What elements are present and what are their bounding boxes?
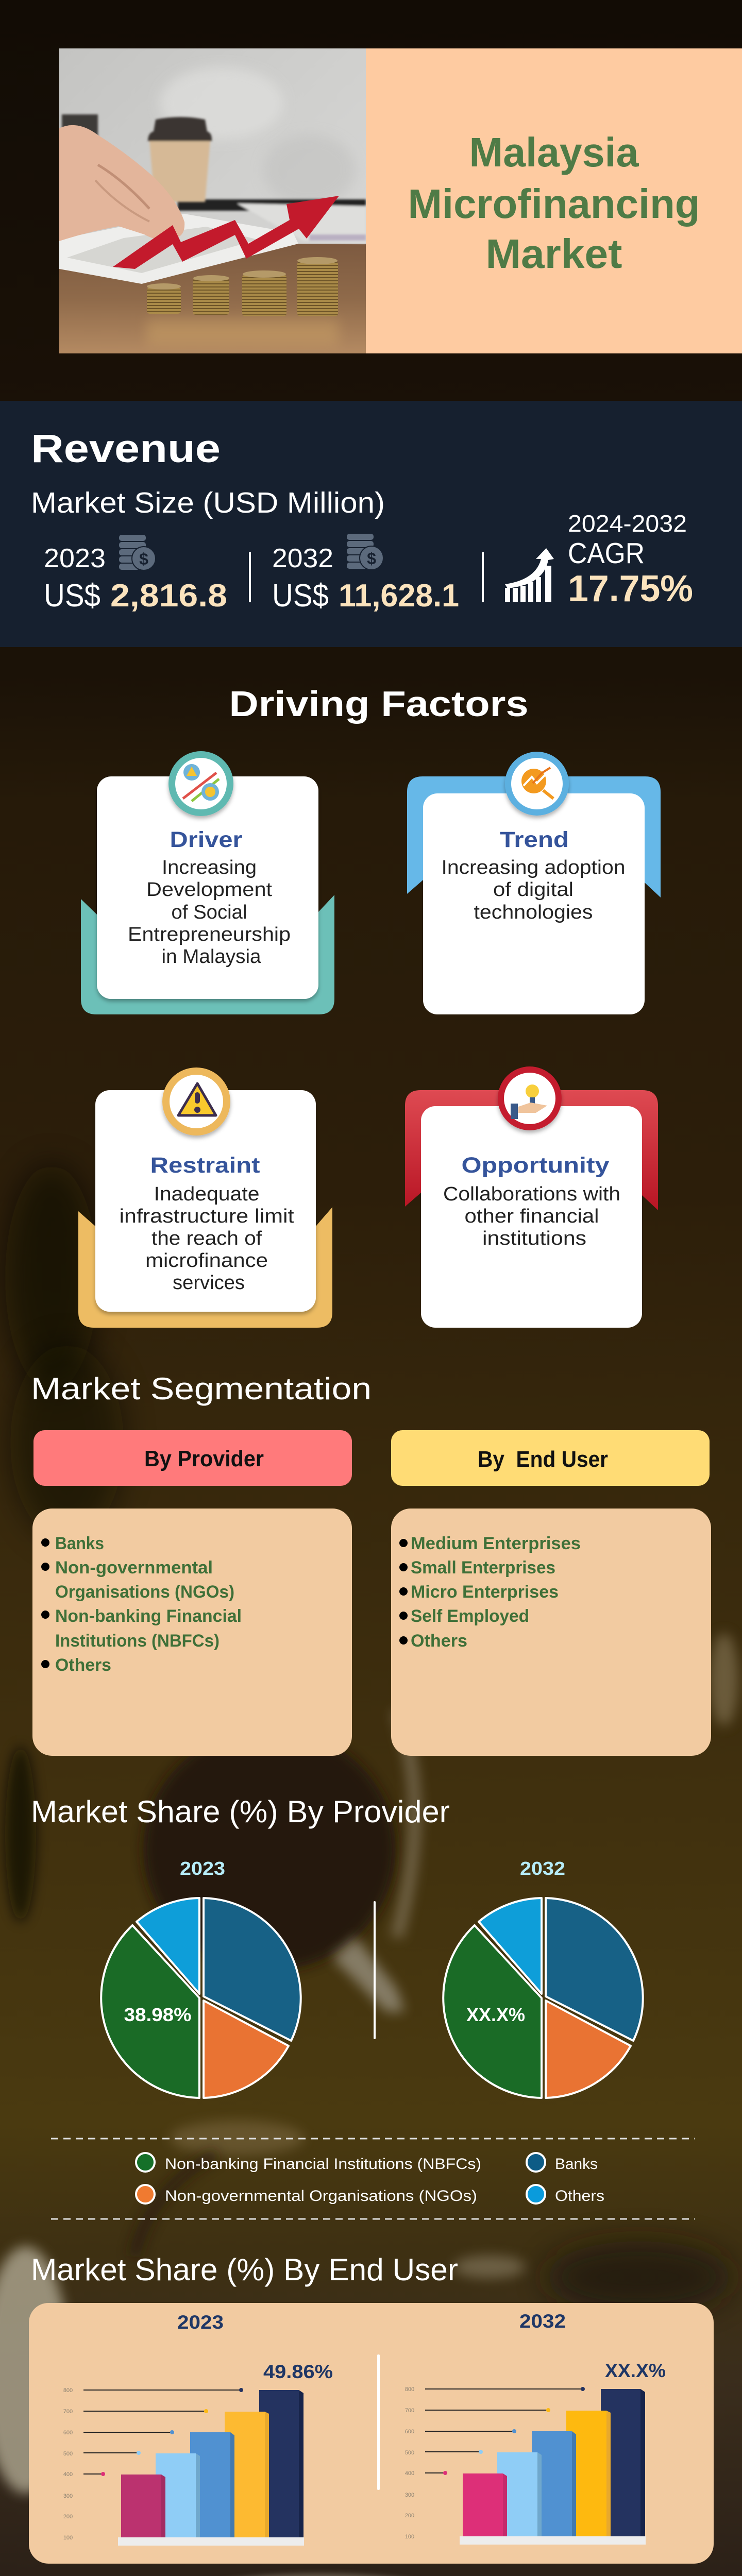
bar chart 2023: 400 — [63, 2471, 73, 2478]
bar chart 2023: 700 — [63, 2409, 73, 2415]
bar chart 2032 — [405, 2386, 646, 2545]
restraint text: services — [173, 1272, 245, 1294]
panel: end user list: Self Employed — [411, 1606, 529, 1626]
bar chart 2032: 100 — [405, 2534, 414, 2540]
red arrow — [113, 196, 339, 269]
stat: 2032: 2032 — [272, 544, 333, 573]
card: trend — [407, 752, 661, 1014]
icon: restraint — [162, 1067, 230, 1136]
pie chart 2023 — [101, 1898, 301, 2098]
title: Market — [485, 231, 622, 277]
title — [408, 129, 700, 277]
legend: provider: Non-banking Financial Institutions (NBFCs) — [165, 2156, 481, 2173]
heading: market segmentation: Market Segmentation — [31, 1371, 372, 1406]
market size label: Market Size (USD Million) — [31, 486, 385, 519]
pill: by provider — [33, 1430, 352, 1486]
opportunity text: other financial — [465, 1206, 599, 1227]
bar chart 2032: 400 — [405, 2470, 414, 2477]
label: pie 2032: 2032 — [520, 1858, 565, 1879]
panel: end user list: Small Enterprises — [411, 1558, 555, 1578]
label: pie 2023: 2023 — [180, 1858, 225, 1879]
bar chart 2032: 700 — [405, 2408, 414, 2414]
trend heading: Trend — [500, 827, 569, 852]
opportunity text: institutions — [482, 1228, 586, 1249]
restraint text: Inadequate — [154, 1183, 260, 1205]
restraint text: microfinance — [145, 1250, 268, 1272]
CAGR: 2024-2032 — [568, 510, 687, 537]
hero photo — [59, 48, 366, 353]
driver text: Entrepreneurship — [128, 924, 291, 945]
title panel — [366, 48, 742, 353]
icon: coins 2032: $ — [367, 549, 376, 568]
restraint text: the reach of — [151, 1228, 262, 1249]
driver text: of Social — [171, 902, 247, 923]
divider — [482, 552, 484, 602]
panel: provider list: Non-governmental — [55, 1558, 213, 1578]
panel: provider list: Others — [55, 1655, 111, 1675]
card: restraint — [78, 1067, 332, 1328]
panel: provider list: Institutions (NBFCs) — [55, 1631, 220, 1651]
restraint text — [120, 1183, 294, 1294]
stat: 2023: US$ — [44, 578, 100, 614]
bar chart 2023: 300 — [63, 2493, 73, 2499]
CAGR — [568, 510, 693, 609]
bar chart 2032: 500 — [405, 2450, 414, 2456]
pill: by provider: By Provider — [144, 1446, 264, 1471]
restraint heading: Restraint — [150, 1153, 260, 1178]
legend: provider: Non-governmental Organisations (NGOs) — [165, 2188, 477, 2205]
icon: coins 2023 — [119, 535, 156, 570]
heading: market share by end user: Market Share (%) By End User — [31, 2252, 458, 2287]
opportunity text — [443, 1183, 620, 1249]
coin stacks — [147, 257, 339, 345]
driver heading: Driver — [170, 827, 243, 852]
legend: provider: Others — [555, 2188, 604, 2205]
pie chart 2032 — [443, 1898, 643, 2098]
panel: provider list: Non-banking Financial — [55, 1606, 242, 1626]
pie chart 2032: XX.X% — [466, 2004, 525, 2025]
bar chart 2023: 800 — [63, 2387, 73, 2394]
pie chart 2023: 38.98% — [124, 2004, 192, 2025]
driver text: Increasing — [162, 857, 257, 878]
opportunity heading: Opportunity — [462, 1153, 610, 1178]
label: 2032: 2032 — [519, 2311, 566, 2332]
coffee cup — [148, 117, 212, 202]
stat: 2032 — [272, 544, 459, 614]
revenue band — [0, 401, 742, 647]
icon: growth chart — [505, 548, 554, 602]
driver text: Development — [146, 879, 272, 901]
bar chart 2023: 200 — [63, 2514, 73, 2520]
title: Malaysia — [469, 129, 639, 175]
card: driver — [81, 751, 334, 1014]
label: 2023: 2023 — [177, 2312, 224, 2333]
divider — [374, 1901, 376, 2039]
icon: coins 2023: $ — [139, 550, 148, 568]
panel: end user list: Others — [411, 1631, 467, 1651]
CAGR: CAGR — [568, 537, 645, 570]
trend text: technologies — [474, 902, 593, 923]
restraint text: infrastructure limit — [120, 1206, 294, 1227]
driver text: in Malaysia — [162, 946, 261, 968]
legend: provider: Banks — [555, 2156, 598, 2173]
legend: provider — [136, 2153, 604, 2205]
pill: by end user: By End User — [478, 1447, 608, 1472]
icon: trend — [505, 752, 569, 816]
panel: end user list: Medium Enterprises — [411, 1534, 581, 1553]
icon: coins 2032 — [347, 534, 383, 570]
bar chart 2032: 200 — [405, 2513, 414, 2519]
panel: provider list: Organisations (NGOs) — [55, 1582, 234, 1602]
title: Microfinancing — [408, 181, 700, 227]
icon: opportunity — [498, 1066, 562, 1130]
stat: 2023: 2,816.8 — [110, 578, 227, 614]
trend text: Increasing adoption — [441, 857, 626, 878]
calculator — [59, 214, 298, 284]
panel: end user charts — [29, 2303, 714, 2564]
stat: 2032: 11,628.1 — [339, 578, 459, 614]
stat: 2032: US$ — [272, 578, 329, 614]
opportunity text: Collaborations with — [443, 1183, 620, 1205]
CAGR: 17.75% — [568, 568, 693, 609]
bar chart 2032: 600 — [405, 2429, 414, 2435]
panel: provider list — [32, 1509, 352, 1756]
stat: 2023 — [44, 544, 227, 614]
panel: end user list: Micro Enterprises — [411, 1582, 559, 1602]
panel: provider list: Banks — [55, 1534, 104, 1553]
bar chart 2023: 600 — [63, 2430, 73, 2436]
bar chart 2032: 300 — [405, 2492, 414, 2498]
icon: driver — [168, 751, 233, 816]
divider — [249, 552, 251, 602]
trend text: of digital — [493, 879, 574, 901]
pill: by end user — [391, 1430, 710, 1486]
hand — [59, 125, 184, 241]
driver text — [128, 857, 291, 968]
bar chart 2023: 500 — [63, 2451, 73, 2457]
bar chart 2023: 100 — [63, 2535, 73, 2541]
heading: market share by provider: Market Share (%) By Provider — [31, 1794, 450, 1829]
bar chart 2023 — [63, 2387, 304, 2546]
value 2032: XX.X% — [605, 2360, 666, 2381]
panel: end user list — [391, 1509, 711, 1756]
trend text — [441, 857, 626, 923]
divider — [377, 2354, 380, 2490]
bar chart 2032: 800 — [405, 2386, 414, 2393]
card: opportunity — [405, 1066, 658, 1328]
value 2023: 49.86% — [263, 2361, 333, 2382]
heading: revenue: Revenue — [31, 427, 221, 471]
heading: driving factors: Driving Factors — [229, 684, 529, 724]
stat: 2023: 2023 — [44, 544, 106, 573]
